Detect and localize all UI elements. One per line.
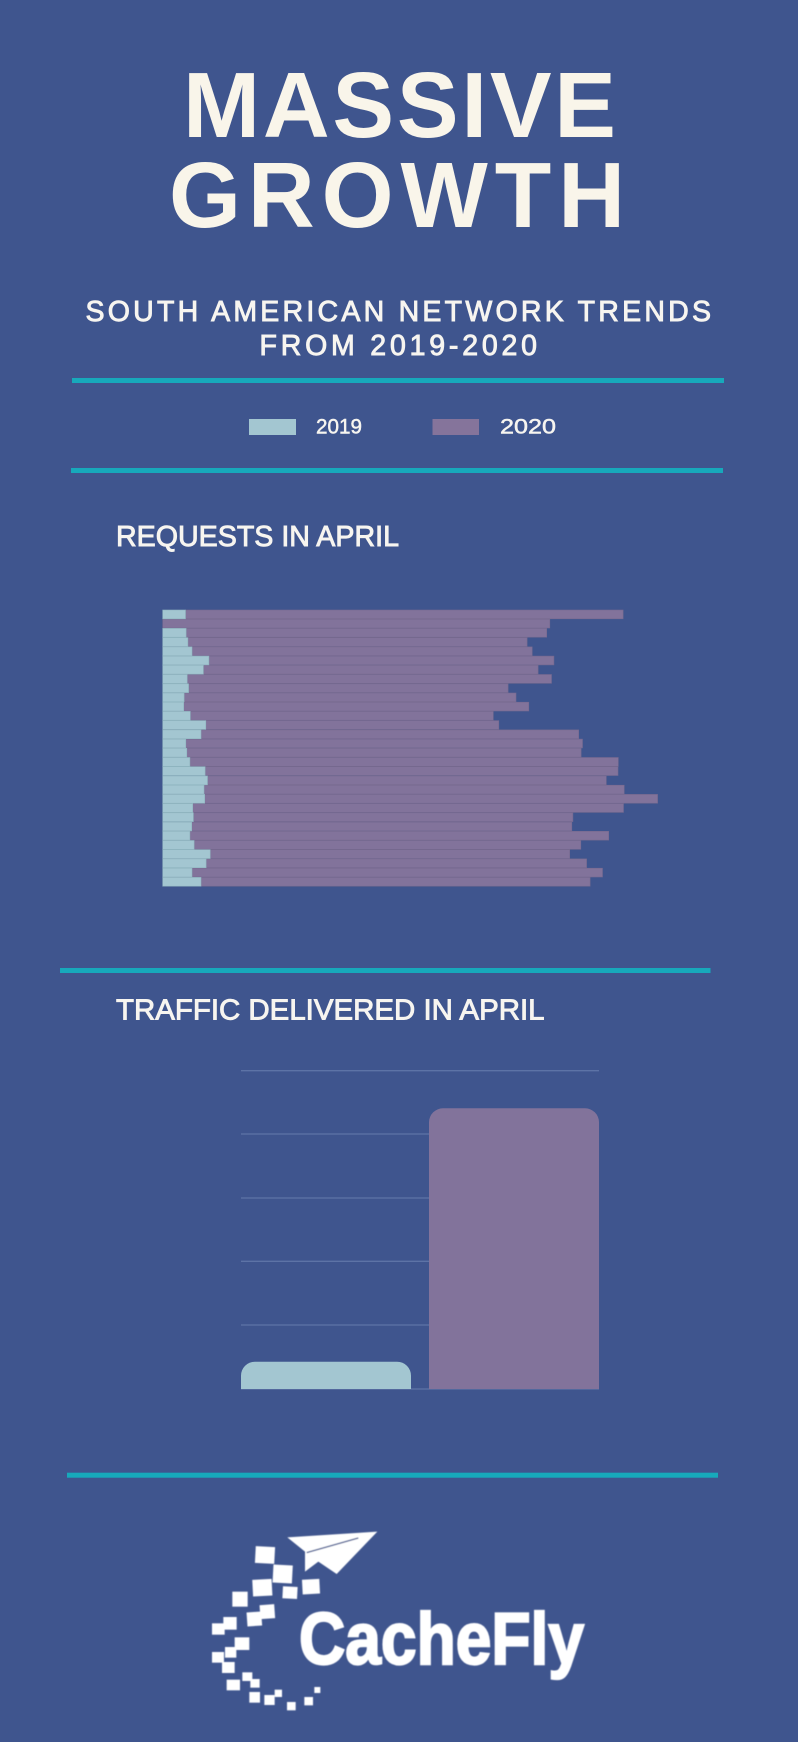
heading: requests in April: REQUESTS IN APRIL — [116, 521, 399, 553]
logo: CacheFly — [212, 1532, 584, 1710]
column 2019 — [241, 1362, 411, 1389]
logo icon: paper plane and squares — [212, 1532, 377, 1710]
legend label 2019: 2019 — [316, 414, 362, 438]
title: MASSIVE — [183, 53, 616, 157]
subtitle: SOUTH AMERICAN NETWORK TRENDS — [86, 296, 711, 328]
title — [169, 53, 625, 247]
2019 bars — [163, 610, 210, 886]
legend swatch 2019 — [249, 419, 296, 435]
subtitle: FROM 2019-2020 — [260, 330, 537, 362]
legend — [249, 414, 556, 438]
column 2020 — [429, 1108, 599, 1389]
heading: traffic delivered in April: TRAFFIC DELIVERED IN APRIL — [116, 994, 544, 1026]
column chart: traffic — [241, 1071, 599, 1389]
legend label 2020: 2020 — [500, 414, 556, 438]
logo wordmark: CacheFly — [299, 1599, 584, 1680]
2020 bars — [163, 610, 658, 886]
subtitle — [86, 296, 711, 362]
title: GROWTH — [169, 143, 625, 247]
stacked bar chart: requests — [163, 610, 658, 886]
legend swatch 2020 — [432, 419, 479, 435]
